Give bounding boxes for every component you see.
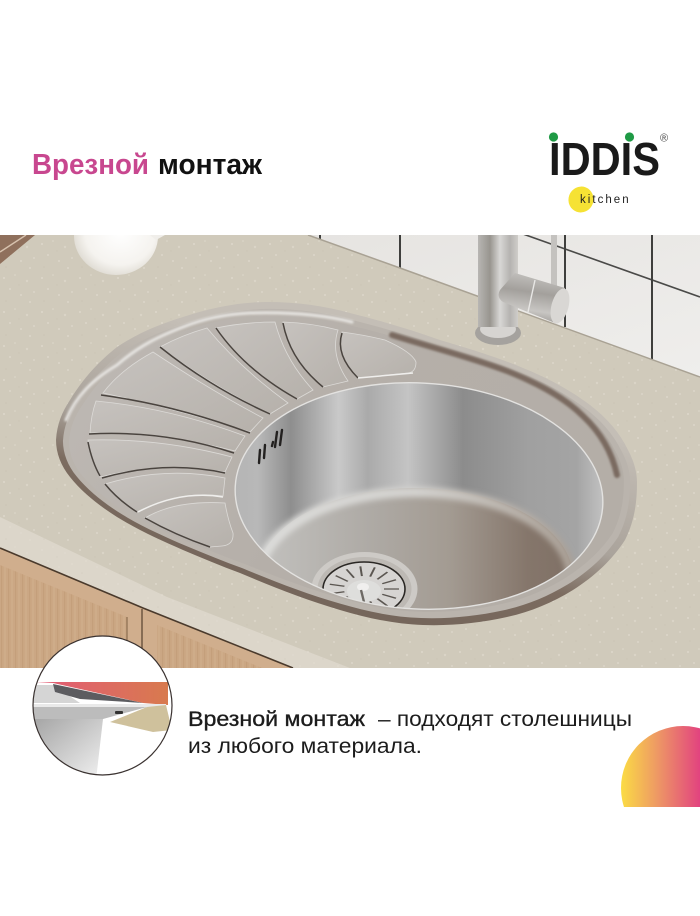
- wooden cabinet doors: [0, 548, 293, 668]
- logo: IDDIS kitchen: [549, 132, 668, 216]
- countertop surface: [36, 682, 168, 705]
- logo: IDDIS kitchen: ®: [660, 132, 668, 144]
- round bowl: [236, 384, 602, 608]
- photo: kitchen sink on countertop: [0, 197, 700, 668]
- dark inner band, back right: [392, 335, 617, 475]
- bowl floor: [270, 488, 570, 608]
- countertop front edge: [0, 517, 350, 668]
- countertop: [0, 235, 700, 668]
- stepped inner rim: [63, 309, 630, 618]
- drain strainer: [312, 552, 418, 608]
- chipboard: [110, 705, 172, 732]
- overflow slots: [259, 430, 282, 463]
- body text: – подходят столешницы: [378, 708, 632, 731]
- deck surface: [69, 315, 624, 612]
- decorative gradient circle: [621, 726, 700, 807]
- title: Врезной: [32, 149, 149, 181]
- sink: [56, 302, 637, 626]
- logo: IDDIS kitchen: IDDIS: [549, 133, 660, 185]
- drainboard dark rib lines: [88, 323, 413, 547]
- wood board and white mug: [0, 235, 165, 275]
- body text: из любого материала.: [188, 735, 422, 758]
- outer rim: [56, 302, 637, 625]
- bowl rim highlight: [229, 374, 609, 618]
- logo: IDDIS kitchen: kitchen: [580, 194, 630, 206]
- inset: mounting cross-section circle: [30, 636, 172, 780]
- bowl wall: [35, 719, 103, 774]
- body text: [188, 708, 632, 758]
- faucet: [475, 235, 573, 345]
- sink edge top: [30, 685, 80, 703]
- body text: Врезной монтаж: [188, 708, 365, 731]
- title: монтаж: [158, 149, 262, 181]
- sink lip: [30, 704, 166, 707]
- rim highlight, back left: [66, 313, 352, 420]
- drainboard ribbed panels: [88, 322, 416, 547]
- title: [32, 149, 262, 181]
- tiled wall: [300, 234, 700, 380]
